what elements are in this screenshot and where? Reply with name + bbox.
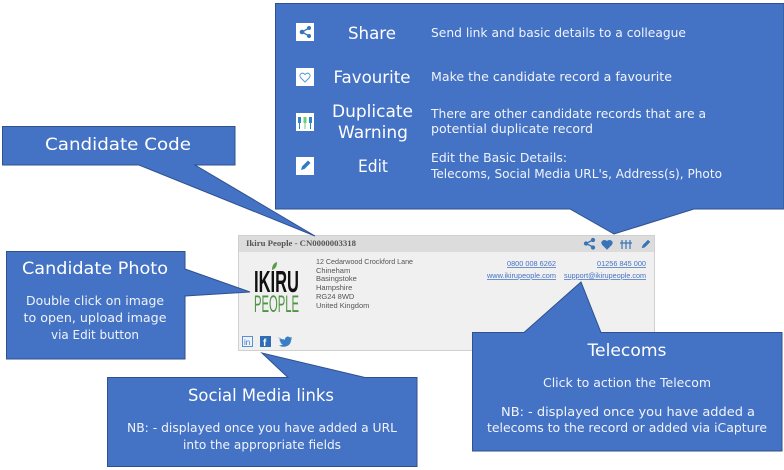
- callout: candidate photo: to open, upload image: [24, 311, 166, 325]
- callout: social media links: into the appropriate fields: [183, 438, 341, 452]
- card title: Ikiru People - CN0000003318: [246, 239, 356, 248]
- heading: duplicate warning: Duplicate: [332, 102, 413, 122]
- callout: action buttons legend: [276, 4, 784, 234]
- callout: candidate code: [2, 126, 315, 236]
- callout: candidate photo: Double click on image: [26, 294, 164, 308]
- address: Basingstoke: [316, 274, 357, 283]
- social media icons: f: [263, 338, 267, 349]
- heading: favourite: Favourite: [334, 68, 410, 88]
- callout: candidate photo: Candidate Photo: [22, 259, 168, 279]
- duplicate warning description: [430, 107, 706, 136]
- heading: edit: Edit: [358, 157, 388, 177]
- callout: social media links: NB: - displayed once you have added a URL: [127, 421, 397, 435]
- callout: telecoms: Click to action the Telecom: [543, 376, 711, 390]
- callout: candidate code: Candidate Code: [45, 135, 191, 155]
- address: RG24 8WD: [316, 292, 355, 301]
- favourite description: Make the candidate record a favourite: [431, 70, 672, 84]
- duplicate warning description: potential duplicate record: [431, 122, 593, 136]
- candidate record card: PEOPLE: [254, 291, 299, 318]
- icon: favourite: [296, 68, 314, 86]
- callout: telecoms: telecoms to the record or added via iCapture: [487, 421, 767, 435]
- edit description: Telecoms, Social Media URL's, Address(s), Photo: [430, 167, 722, 181]
- address: Hampshire: [316, 283, 352, 292]
- heading: share: Share: [348, 24, 396, 44]
- candidate record card: [238, 236, 654, 350]
- duplicate warning description: There are other candidate records that are a: [430, 107, 706, 121]
- address: 12 Cedarwood Crockford Lane: [316, 257, 413, 266]
- address: [316, 257, 413, 310]
- heading: duplicate warning: Warning: [338, 123, 408, 143]
- contact links: 0800 008 6262: [507, 259, 556, 268]
- callout: social media links: Social Media links: [188, 386, 334, 406]
- callout: candidate photo: [6, 252, 250, 359]
- address: Chineham: [316, 266, 350, 275]
- heading: duplicate warning: [332, 102, 413, 143]
- icon: duplicate warning: [296, 113, 314, 131]
- callout: telecoms: [472, 282, 782, 451]
- icon: edit: [296, 157, 314, 175]
- callout: telecoms: NB: - displayed once you have added a: [501, 405, 755, 419]
- icon: share: [296, 23, 314, 41]
- edit description: [430, 151, 722, 181]
- callout: candidate photo: via Edit button: [51, 328, 139, 342]
- social media icons: in: [244, 338, 250, 347]
- callout: social media links: [108, 353, 417, 466]
- contact links: [486, 259, 646, 280]
- social media icons: [242, 336, 292, 349]
- contact links: 01256 845 000: [597, 259, 646, 268]
- logo: Ikiru People: IKIRU: [254, 264, 299, 299]
- contact links: support@ikirupeople.com: [564, 271, 646, 280]
- header action icons: [584, 238, 650, 249]
- address: United Kingdom: [316, 301, 369, 310]
- contact links: www.ikirupeople.com: [486, 271, 556, 280]
- share description: Send link and basic details to a colleague: [431, 26, 686, 40]
- callout: telecoms: Telecoms: [586, 341, 667, 361]
- logo: Ikiru People: [254, 262, 299, 318]
- edit description: Edit the Basic Details:: [431, 151, 567, 165]
